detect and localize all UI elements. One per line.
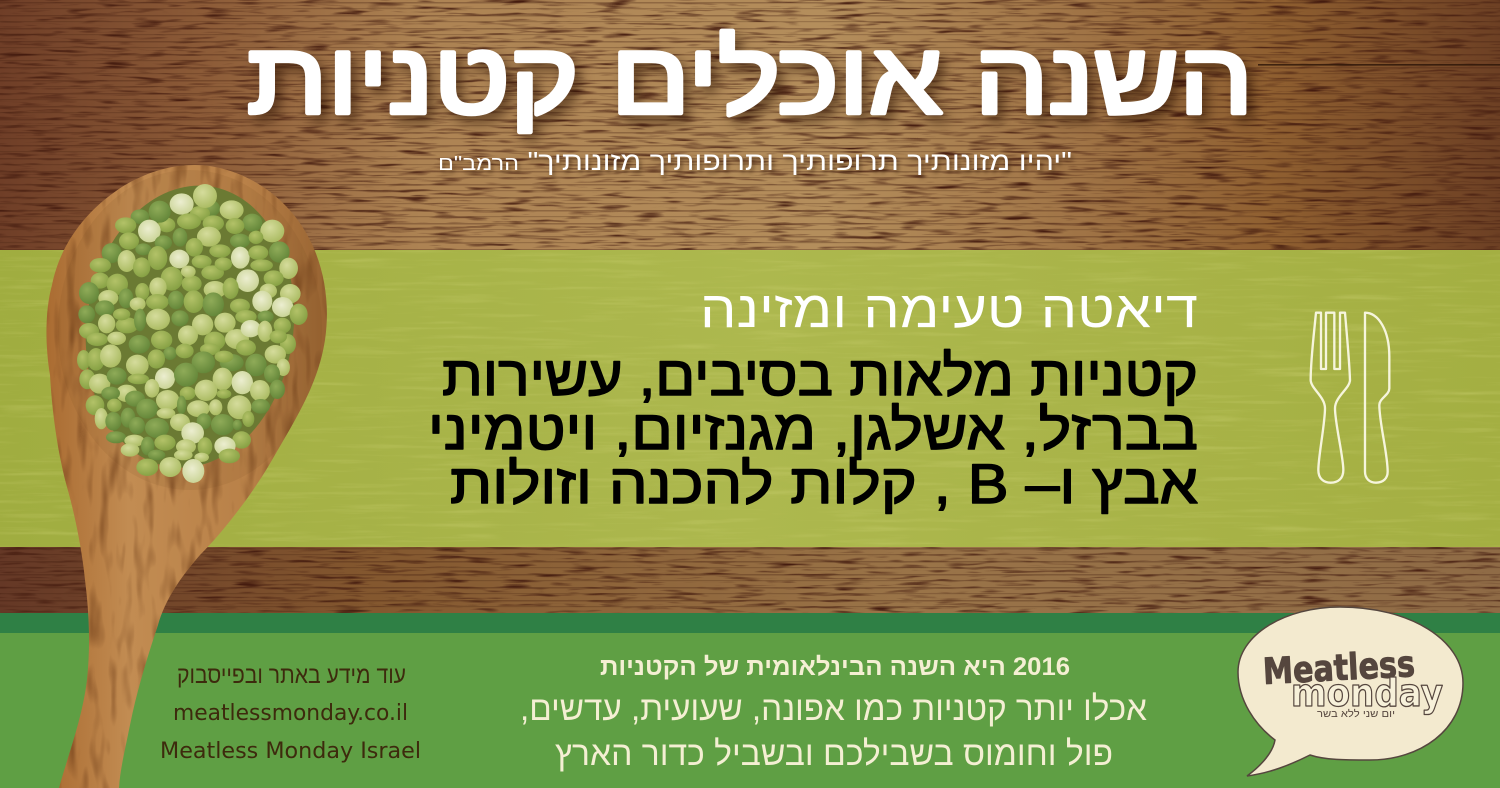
- olive green band: [0, 250, 1500, 547]
- footer center: legume year message: אכלו יותר קטניות כמו אפונה, שעועית, עדשים,: [520, 690, 1147, 728]
- footer left: contact info: [160, 662, 421, 764]
- subtitle quote: "יהיו מזונותיך תרופותיך ותרופותיך מזונותיך" הרמב"ם: [438, 146, 1072, 176]
- logo: Meatless Monday speech bubble: [1238, 607, 1463, 776]
- section heading: דיאטה טעימה ומזינה: [700, 281, 1198, 339]
- green footer: [0, 633, 1500, 788]
- footer center: legume year message: 2016 היא השנה הבינלאומית של הקטניות: [600, 653, 1070, 681]
- footer left: contact info: עוד מידע באתר ובפייסבוק: [177, 662, 406, 689]
- nutrition text block: [428, 344, 1198, 515]
- icon: knife: [1365, 313, 1389, 483]
- footer left: contact info: Meatless Monday Israel: [160, 739, 421, 764]
- peas: [68, 172, 312, 483]
- logo word: monday: monday: [1291, 671, 1443, 715]
- logo word: Meatless: Meatless: [1262, 644, 1416, 693]
- wood background: top plank: [0, 0, 1500, 250]
- icon: fork and knife: [1311, 313, 1389, 483]
- nutrition text block: אבץ ו– B , קלות להכנה וזולות: [450, 452, 1198, 515]
- wood background: lower plank: [0, 547, 1500, 613]
- nutrition text block: קטניות מלאות בסיבים, עשירות: [442, 344, 1198, 407]
- speech bubble: [1238, 607, 1463, 776]
- logo tagline: יום שני ללא בשר: [1317, 708, 1395, 720]
- nutrition text block: בברזל, אשלגן, מגנזיום, ויטמיני: [428, 398, 1198, 461]
- icon: fork: [1311, 313, 1350, 483]
- footer center: legume year message: [520, 653, 1147, 773]
- footer center: legume year message: פול וחומוס בשבילכם ובשביל כדור הארץ: [555, 735, 1113, 773]
- dark green stripe: [0, 613, 1500, 633]
- spoon with split peas: [40, 160, 335, 788]
- footer left: contact info: meatlessmonday.co.il: [173, 701, 408, 726]
- spoon body: [40, 160, 335, 788]
- title: השנה אוכלים קטניות: [247, 23, 1253, 135]
